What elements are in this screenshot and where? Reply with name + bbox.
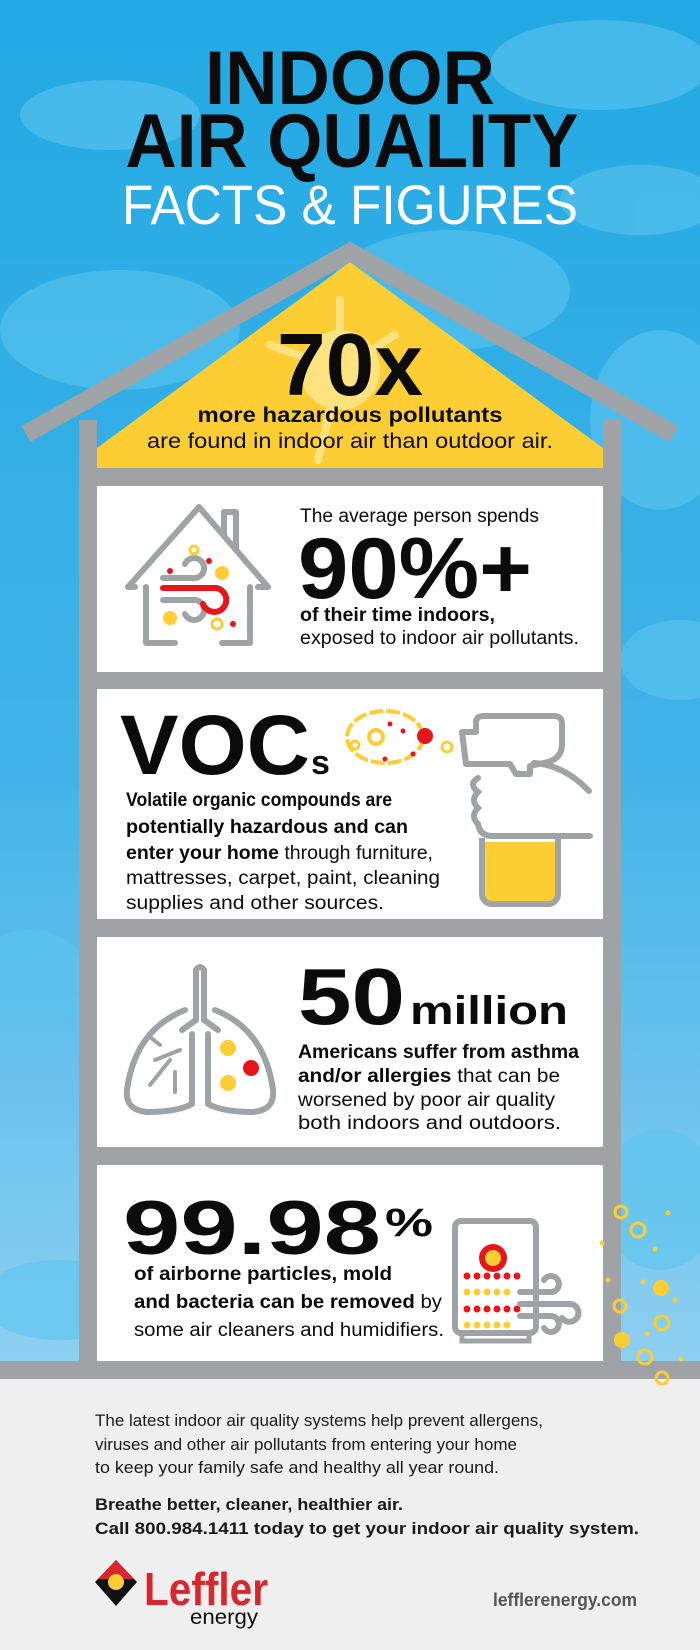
fact 1: 70x: are found in indoor air than outdoor air.: [147, 430, 553, 453]
icon: lungs: [127, 967, 273, 1112]
footer text: Call 800.984.1411 today to get your indoor air quality system.: [95, 1520, 639, 1538]
footer text: The latest indoor air quality systems help prevent allergens,: [95, 1412, 543, 1430]
panel: 90%: of their time indoors,: [300, 605, 495, 626]
panel: VOCs: supplies and other sources.: [126, 893, 384, 914]
panel: 50 million: both indoors and outdoors.: [298, 1113, 561, 1134]
icon: particles outside: [600, 1206, 684, 1384]
panel: 99.98%: some air cleaners and humidifiers.: [134, 1320, 444, 1341]
panel: 50 million: 50: [298, 952, 405, 1041]
panel: 50 million: million: [410, 989, 568, 1033]
panel: VOCs: s: [311, 744, 330, 782]
fact 1: 70x: 70x: [277, 315, 423, 414]
icon: VOC cloud: [347, 711, 452, 763]
footer text: [95, 1412, 639, 1538]
clouds: [0, 20, 700, 1340]
panel: 99.98%: [97, 1165, 603, 1361]
house walls: [0, 420, 700, 1379]
fact 1: 70x: more hazardous pollutants: [198, 404, 502, 427]
panel: VOCs: [97, 689, 603, 919]
panel: 99.98%: 99.98: [123, 1186, 381, 1271]
panel: 99.98%: and bacteria can be removed by: [134, 1292, 443, 1313]
panel: 50 million: and/or allergies that can be: [298, 1066, 560, 1087]
icon: spray bottle: [462, 716, 590, 904]
panel: VOCs: mattresses, carpet, paint, cleaning: [126, 868, 440, 889]
logo: Leffler energy: energy: [190, 1606, 259, 1629]
title: [122, 36, 578, 236]
fact 1: 70x: [147, 315, 553, 453]
panel: 90%: 90%+: [298, 521, 532, 617]
panel: 90%: [97, 486, 603, 672]
title: AIR QUALITY: [126, 99, 578, 184]
panel: VOCs: VOC: [120, 698, 310, 792]
title: FACTS & FIGURES: [122, 173, 578, 236]
logo: Leffler energy: Leffler: [144, 1563, 268, 1615]
virus decoration: [270, 300, 395, 460]
panel: VOCs: potentially hazardous and can: [126, 817, 408, 838]
panel: 50 million: Americans suffer from asthma: [298, 1042, 579, 1063]
panel: 90%: The average person spends: [300, 506, 539, 527]
panel: 99.98%: of airborne particles, mold: [134, 1264, 392, 1285]
footer text: viruses and other air pollutants from entering your home: [95, 1436, 517, 1454]
roof: [26, 252, 674, 434]
title: INDOOR: [205, 36, 495, 121]
icon: house with air: [128, 507, 268, 643]
panel: 50 million: worsened by poor air quality: [297, 1090, 556, 1111]
panel: VOCs: enter your home through furniture,: [126, 843, 433, 864]
panel: 90%: exposed to indoor air pollutants.: [300, 628, 579, 649]
logo: Leffler energy: [95, 1560, 268, 1629]
icon: air cleaner: [455, 1221, 578, 1341]
panel: 99.98%: %: [385, 1201, 433, 1245]
footer text: Breathe better, cleaner, healthier air.: [95, 1496, 403, 1514]
footer background: [0, 1379, 700, 1650]
house: yellow gable: [97, 262, 603, 468]
footer text: to keep your family safe and healthy all year round.: [95, 1459, 499, 1477]
panel: VOCs: Volatile organic compounds are: [126, 790, 392, 811]
website url: lefflerenergy.com: [493, 1590, 637, 1610]
panel: 50 million: [97, 937, 603, 1147]
